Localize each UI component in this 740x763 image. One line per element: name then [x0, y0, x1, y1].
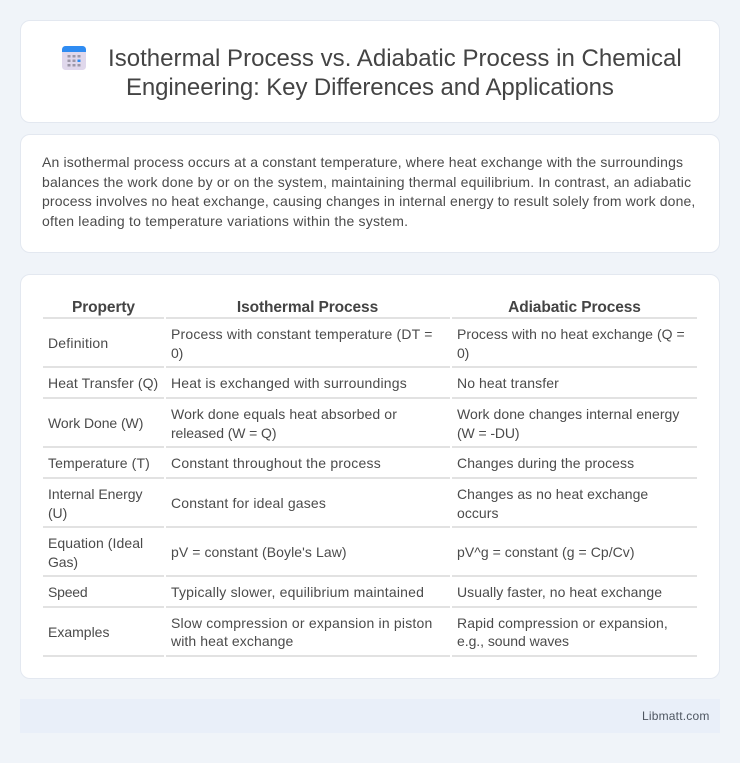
comparison table: Process with no heat exchange (Q =	[457, 326, 685, 342]
comparison table: Adiabatic Process	[508, 299, 641, 316]
row: heat transfer	[43, 375, 697, 399]
comparison table: Constant throughout the process	[171, 455, 381, 471]
text block: introduction: often leading to temperature variations within the system.	[42, 213, 408, 229]
icon: calendar grid	[62, 46, 86, 70]
panel: title card	[20, 20, 720, 123]
text block: introduction: An isothermal process occurs at a constant temperature, where heat exchange with the surroundings	[42, 154, 683, 170]
panel: comparison table card	[20, 274, 720, 679]
comparison table: Work done changes internal energy	[457, 406, 679, 422]
title: Isothermal Process vs. Adiabatic Process in Chemical	[108, 45, 682, 72]
comparison table: pV = constant (Boyle's Law)	[171, 544, 347, 560]
comparison table: 0)	[171, 345, 183, 361]
comparison table: e.g., sound waves	[457, 633, 569, 649]
text block: introduction: process involves no heat exchange, causing changes in internal energy to result solely from work done,	[42, 193, 695, 209]
comparison table: Equation (Ideal	[48, 535, 143, 551]
comparison table: Heat Transfer (Q)	[48, 375, 158, 391]
comparison table	[43, 299, 697, 657]
row: examples	[43, 615, 697, 657]
comparison table: Slow compression or expansion in piston	[171, 615, 432, 631]
footer bar	[20, 699, 720, 733]
comparison table: Definition	[48, 335, 108, 351]
row: definition	[43, 326, 697, 368]
panel: introduction card	[20, 134, 720, 253]
row: internal energy	[43, 486, 697, 528]
comparison table: released (W = Q)	[171, 425, 276, 441]
title: Engineering: Key Differences and Applications	[126, 74, 614, 101]
comparison table: Temperature (T)	[48, 455, 150, 471]
title	[108, 45, 682, 101]
comparison table: Heat is exchanged with surroundings	[171, 375, 407, 391]
row: work done	[43, 406, 697, 448]
comparison table: pV^g = constant (g = Cp/Cv)	[457, 544, 635, 560]
comparison table: Changes during the process	[457, 455, 634, 471]
footer text: Libmatt.com	[642, 709, 710, 723]
comparison table: Rapid compression or expansion,	[457, 615, 668, 631]
comparison table: occurs	[457, 505, 499, 521]
comparison table: Typically slower, equilibrium maintained	[171, 584, 424, 600]
comparison table: Usually faster, no heat exchange	[457, 584, 662, 600]
comparison table: Examples	[48, 624, 109, 640]
comparison table: Process with constant temperature (DT =	[171, 326, 433, 342]
comparison table: Gas)	[48, 554, 78, 570]
comparison table: Isothermal Process	[237, 299, 378, 316]
comparison table: Property	[72, 299, 135, 316]
comparison table: Speed	[48, 584, 87, 600]
comparison table: 0)	[457, 345, 469, 361]
row: equation	[43, 535, 697, 577]
comparison table: Internal Energy	[48, 486, 142, 502]
comparison table: No heat transfer	[457, 375, 559, 391]
comparison table: with heat exchange	[171, 633, 293, 649]
comparison table: (U)	[48, 505, 67, 521]
text block: introduction: balances the work done by or on the system, maintaining thermal equilibrium. In contrast, an adiabatic	[42, 174, 691, 190]
comparison table: (W = -DU)	[457, 425, 519, 441]
row: temperature	[43, 455, 697, 479]
comparison table: Constant for ideal gases	[171, 495, 326, 511]
table header row	[43, 299, 697, 319]
comparison table: Work done equals heat absorbed or	[171, 406, 397, 422]
comparison table: Changes as no heat exchange	[457, 486, 648, 502]
comparison table: Work Done (W)	[48, 415, 143, 431]
row: speed	[43, 584, 697, 608]
text block: introduction	[42, 154, 695, 229]
